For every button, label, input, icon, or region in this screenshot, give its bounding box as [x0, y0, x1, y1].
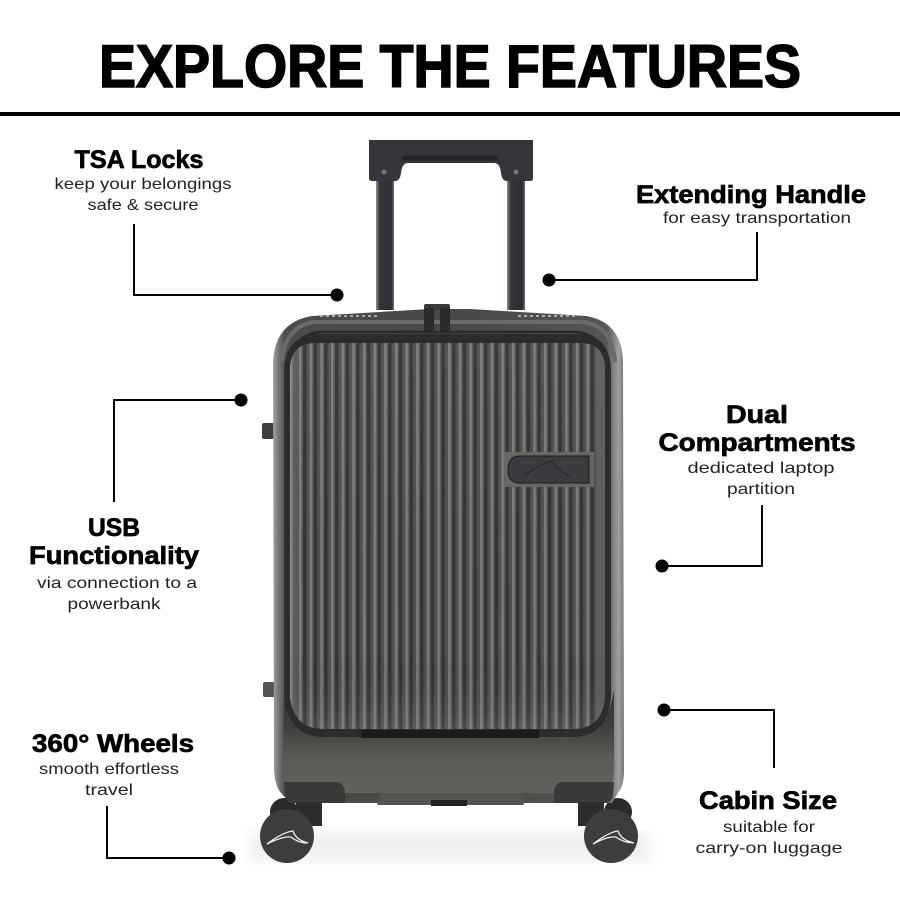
wheel housings: [284, 782, 345, 803]
front pocket: [284, 334, 611, 737]
callout: TSA Locks: [54, 146, 344, 302]
callout: TSA Locks: keep your belongings: [54, 176, 232, 193]
callout: Extending Handle: Extending Handle: [636, 181, 866, 209]
telescopic handle: [369, 140, 533, 310]
callout: Dual Compartments: Compartments: [658, 429, 856, 457]
title rule: [0, 112, 900, 116]
callout: 360 Wheels: 360° Wheels: [32, 730, 194, 758]
callout: 360 Wheels: [32, 730, 236, 864]
callout: Cabin Size: [658, 704, 843, 857]
callout: Dual Compartments: [656, 401, 856, 572]
callout: Cabin Size: suitable for: [723, 819, 816, 836]
top rim highlights: [320, 315, 578, 317]
callout: Cabin Size: carry-on luggage: [696, 840, 843, 857]
callout: Extending Handle: for easy transportation: [663, 210, 851, 227]
callout: Dual Compartments: Dual: [726, 401, 788, 429]
callout: USB Functionality: [29, 394, 248, 613]
callout: Extending Handle: [542, 181, 866, 286]
base: [283, 690, 614, 793]
callout: Dual Compartments: dedicated laptop: [688, 460, 835, 477]
callout: Dual Compartments: partition: [727, 481, 795, 498]
front wheels: [260, 809, 638, 863]
callout: 360 Wheels: smooth effortless: [39, 761, 179, 778]
zipper pulls: [424, 304, 450, 331]
side buttons: [262, 423, 274, 439]
callout: USB Functionality: USB: [88, 514, 140, 542]
pocket tab: [361, 730, 539, 738]
callout: TSA Locks: safe & secure: [88, 197, 199, 214]
undercarriage recess: [377, 793, 524, 805]
shell: [273, 309, 624, 803]
logo badge: [504, 452, 594, 487]
rear wheels: [270, 798, 632, 826]
callout: USB Functionality: Functionality: [29, 542, 199, 570]
callout: Cabin Size: Cabin Size: [699, 787, 837, 815]
zipper seam: [288, 332, 608, 370]
callout: USB Functionality: powerbank: [68, 596, 162, 613]
title: EXPLORE THE FEATURES: [99, 33, 801, 100]
suitcase: [250, 140, 650, 863]
callout: TSA Locks: TSA Locks: [74, 146, 204, 174]
callout: 360 Wheels: travel: [85, 782, 133, 799]
floor shadow: [250, 832, 650, 862]
callout: USB Functionality: via connection to a: [37, 575, 197, 592]
